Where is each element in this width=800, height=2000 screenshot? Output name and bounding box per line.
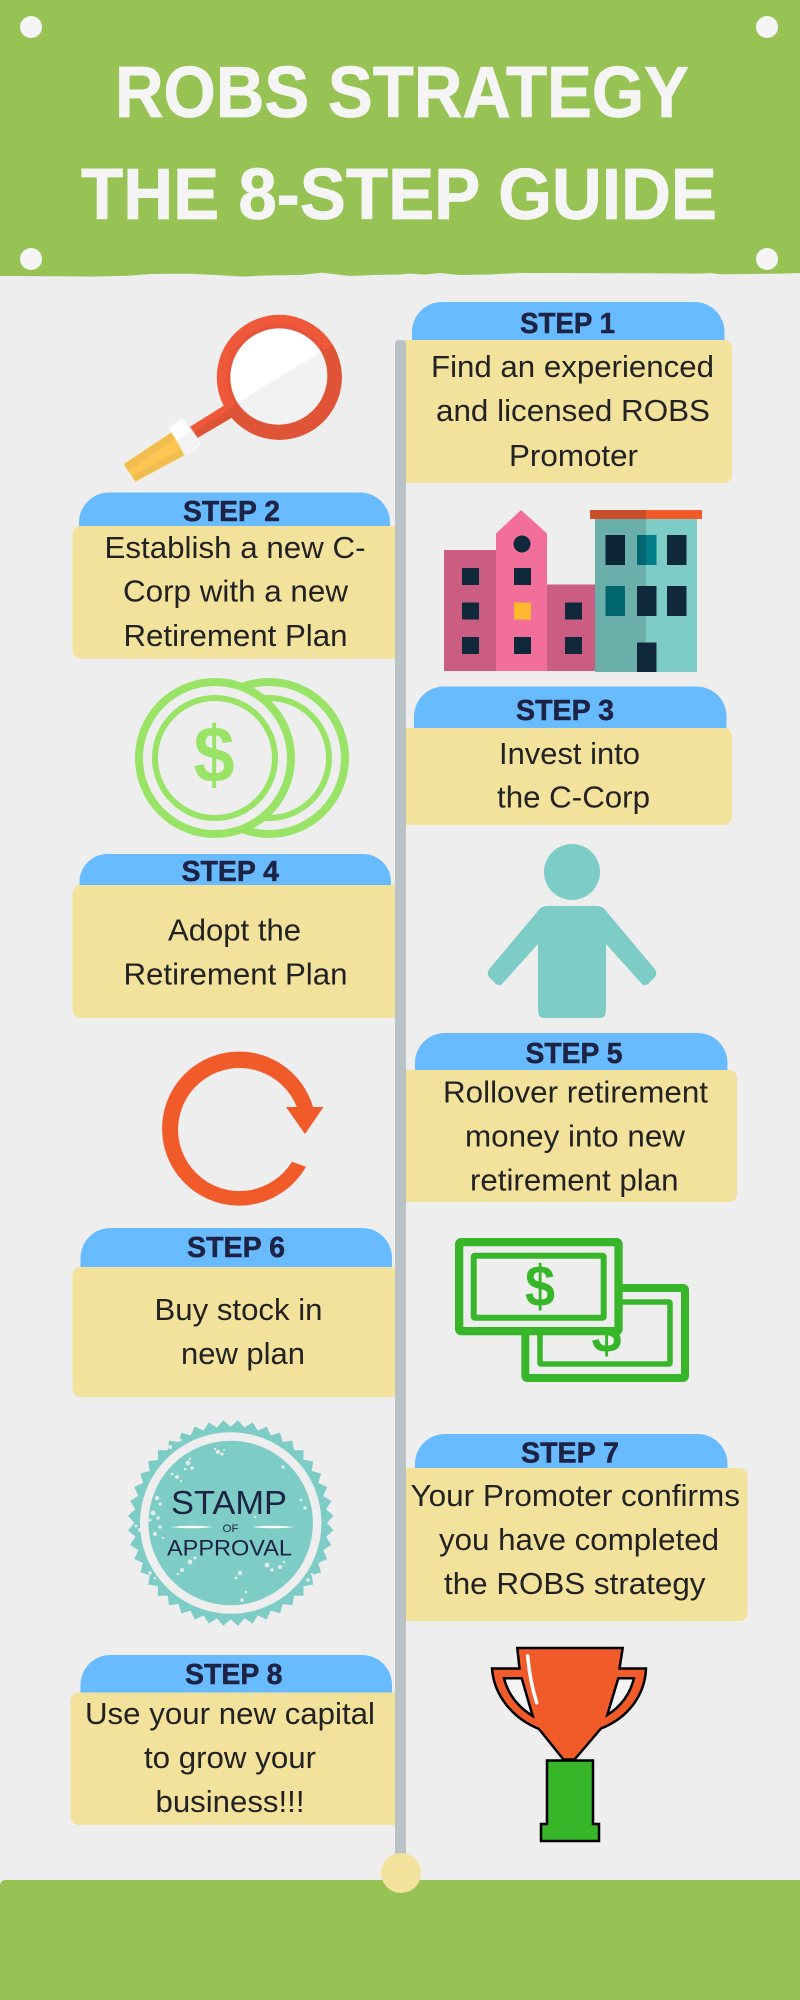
footer band: [0, 1880, 800, 2000]
step 8 label: STEP 8: [185, 1659, 282, 1691]
step 4 text: Adopt the: [168, 912, 301, 948]
step 2 text: [104, 530, 366, 653]
arc: [162, 1052, 313, 1206]
step 4 card: [72, 885, 402, 1018]
body: [488, 906, 656, 1018]
step 5 text: Rollover retirement: [443, 1074, 708, 1110]
step 1 tab: [412, 302, 725, 342]
lens shade: [235, 350, 330, 428]
step 1 card: [396, 340, 732, 483]
corner pin bottom left: [20, 248, 42, 270]
step 7 tab: [415, 1434, 728, 1469]
divider left: [170, 1526, 213, 1528]
step 2 label: STEP 2: [183, 496, 280, 528]
corner pin top left: [20, 16, 42, 38]
step 7: [396, 1434, 748, 1621]
title line 1: ROBS STRATEGY: [115, 53, 689, 133]
front bill outer: [459, 1242, 619, 1331]
icon: magnifying glass: [124, 322, 342, 481]
title line 2: THE 8-STEP GUIDE: [81, 155, 717, 235]
timeline end dot: [381, 1853, 421, 1893]
arrow head: [286, 1107, 324, 1134]
step 6 text: new plan: [181, 1336, 305, 1371]
white collar: [170, 420, 198, 454]
step 4 tab: [80, 854, 391, 886]
head: [544, 844, 600, 900]
icon: circular arrow: [162, 1052, 324, 1206]
collar shade: [177, 431, 200, 455]
gap ring: [144, 1436, 317, 1610]
back coin inner ring: [209, 698, 329, 818]
step 2 text: Corp with a new: [123, 574, 349, 608]
teal windows: [606, 535, 656, 616]
banner torn-edge background: [0, 0, 800, 277]
rear bill inner: [540, 1302, 670, 1364]
step 3 tab: [414, 686, 726, 729]
rear dollar: $: [592, 1300, 622, 1365]
handle grip: [125, 433, 183, 480]
low block: [547, 584, 598, 671]
step 4 text: Retirement Plan: [124, 956, 348, 992]
step 2 text: Retirement Plan: [124, 618, 348, 653]
step 8 text: business!!!: [156, 1784, 304, 1819]
left handle opening: [504, 1678, 533, 1716]
icon: city buildings: [444, 510, 702, 672]
step 6 label: STEP 6: [187, 1232, 285, 1264]
step 4 label: STEP 4: [182, 856, 279, 888]
handle rod shade: [194, 410, 233, 438]
step 1: [396, 302, 732, 483]
step 6: [72, 1228, 402, 1397]
step 3: [396, 686, 732, 825]
divider right: [252, 1526, 295, 1528]
icon: coins: [139, 682, 345, 834]
lens: [227, 325, 331, 429]
step 3 label: STEP 3: [516, 695, 614, 727]
base: [541, 1760, 599, 1841]
grip shade top: [124, 433, 175, 471]
lit window: [514, 602, 531, 620]
step 8 card: [70, 1692, 402, 1825]
tower round window: [514, 536, 530, 552]
step 5 card: [396, 1070, 737, 1202]
step 5 text: money into new: [465, 1118, 686, 1154]
front bill inner: [474, 1256, 604, 1318]
step 3 text: Invest into: [499, 736, 640, 771]
step 5 text: [443, 1074, 708, 1198]
step 5 text: retirement plan: [470, 1162, 678, 1198]
dollar sign: $: [194, 710, 234, 799]
step 8 text: Use your new capital: [85, 1696, 375, 1731]
step 1 text: Promoter: [509, 438, 638, 473]
roof light: [646, 510, 702, 519]
front coin inner ring: [155, 698, 275, 818]
step 6 tab: [80, 1228, 392, 1268]
step 7 text: you have completed: [439, 1522, 719, 1557]
ring inner band: [228, 326, 323, 404]
front coin: [139, 682, 291, 834]
step 1 text: [431, 349, 714, 473]
corner pin top right: [756, 16, 778, 38]
corner pin bottom right: [756, 248, 778, 270]
serrated edge: [128, 1420, 333, 1626]
step 6 text: Buy stock in: [154, 1292, 322, 1327]
step 2 text: Establish a new C-: [104, 530, 366, 565]
step 8 text: [85, 1696, 375, 1819]
step 3 text: the C-Corp: [497, 780, 650, 814]
step 7 label: STEP 7: [521, 1438, 619, 1470]
ring shade: [226, 345, 342, 440]
step 4 text: [124, 912, 348, 992]
cup: [492, 1648, 646, 1760]
step 7 text: Your Promoter confirms: [410, 1478, 740, 1513]
step 7 text: the ROBS strategy: [444, 1566, 706, 1601]
STAMP word: STAMP: [171, 1484, 287, 1521]
right handle opening: [607, 1678, 634, 1715]
teal window highlight: [646, 535, 656, 565]
step 7 text: [410, 1478, 740, 1601]
distress specks: [127, 1438, 321, 1602]
step 4: [72, 854, 402, 1018]
step 8 text: to grow your: [144, 1740, 316, 1775]
step 8: [70, 1655, 402, 1825]
step 2 tab: [79, 492, 390, 527]
teal building shade: [595, 519, 646, 672]
step 2 card: [72, 526, 402, 659]
back coin rim: [193, 682, 345, 834]
step 2: [72, 492, 402, 659]
step 3 text: [497, 736, 650, 814]
step 1 label: STEP 1: [520, 308, 615, 340]
cup highlight: [528, 1656, 537, 1703]
left block: [444, 550, 496, 671]
handle rod: [190, 403, 233, 438]
header banner: [0, 0, 800, 277]
OF word: OF: [222, 1523, 239, 1535]
step 6 card: [72, 1267, 402, 1397]
icon: stamp of approval: [127, 1420, 333, 1626]
step 3 card: [396, 728, 732, 825]
step 5: [396, 1033, 737, 1202]
step 1 text: Find an experienced: [431, 349, 714, 384]
step 5 label: STEP 5: [526, 1038, 622, 1070]
step 1 text: and licensed ROBS: [436, 393, 710, 428]
step 5 tab: [415, 1033, 728, 1071]
step 8 tab: [80, 1655, 392, 1694]
block windows: [462, 535, 686, 672]
icon: person: [488, 844, 656, 1018]
rear bill outer: [525, 1288, 685, 1378]
ring: [224, 322, 335, 433]
roof shade: [590, 510, 646, 519]
tower: [496, 510, 547, 671]
step 6 text: [154, 1292, 322, 1371]
step 7 card: [396, 1468, 748, 1621]
teal building light: [646, 519, 697, 672]
front dollar: $: [525, 1254, 555, 1319]
APPROVAL word: APPROVAL: [167, 1536, 292, 1560]
icon: trophy: [492, 1648, 646, 1841]
icon: cash bills: [459, 1242, 685, 1378]
timeline pole: [395, 340, 406, 1865]
grip shade bottom: [132, 450, 183, 481]
